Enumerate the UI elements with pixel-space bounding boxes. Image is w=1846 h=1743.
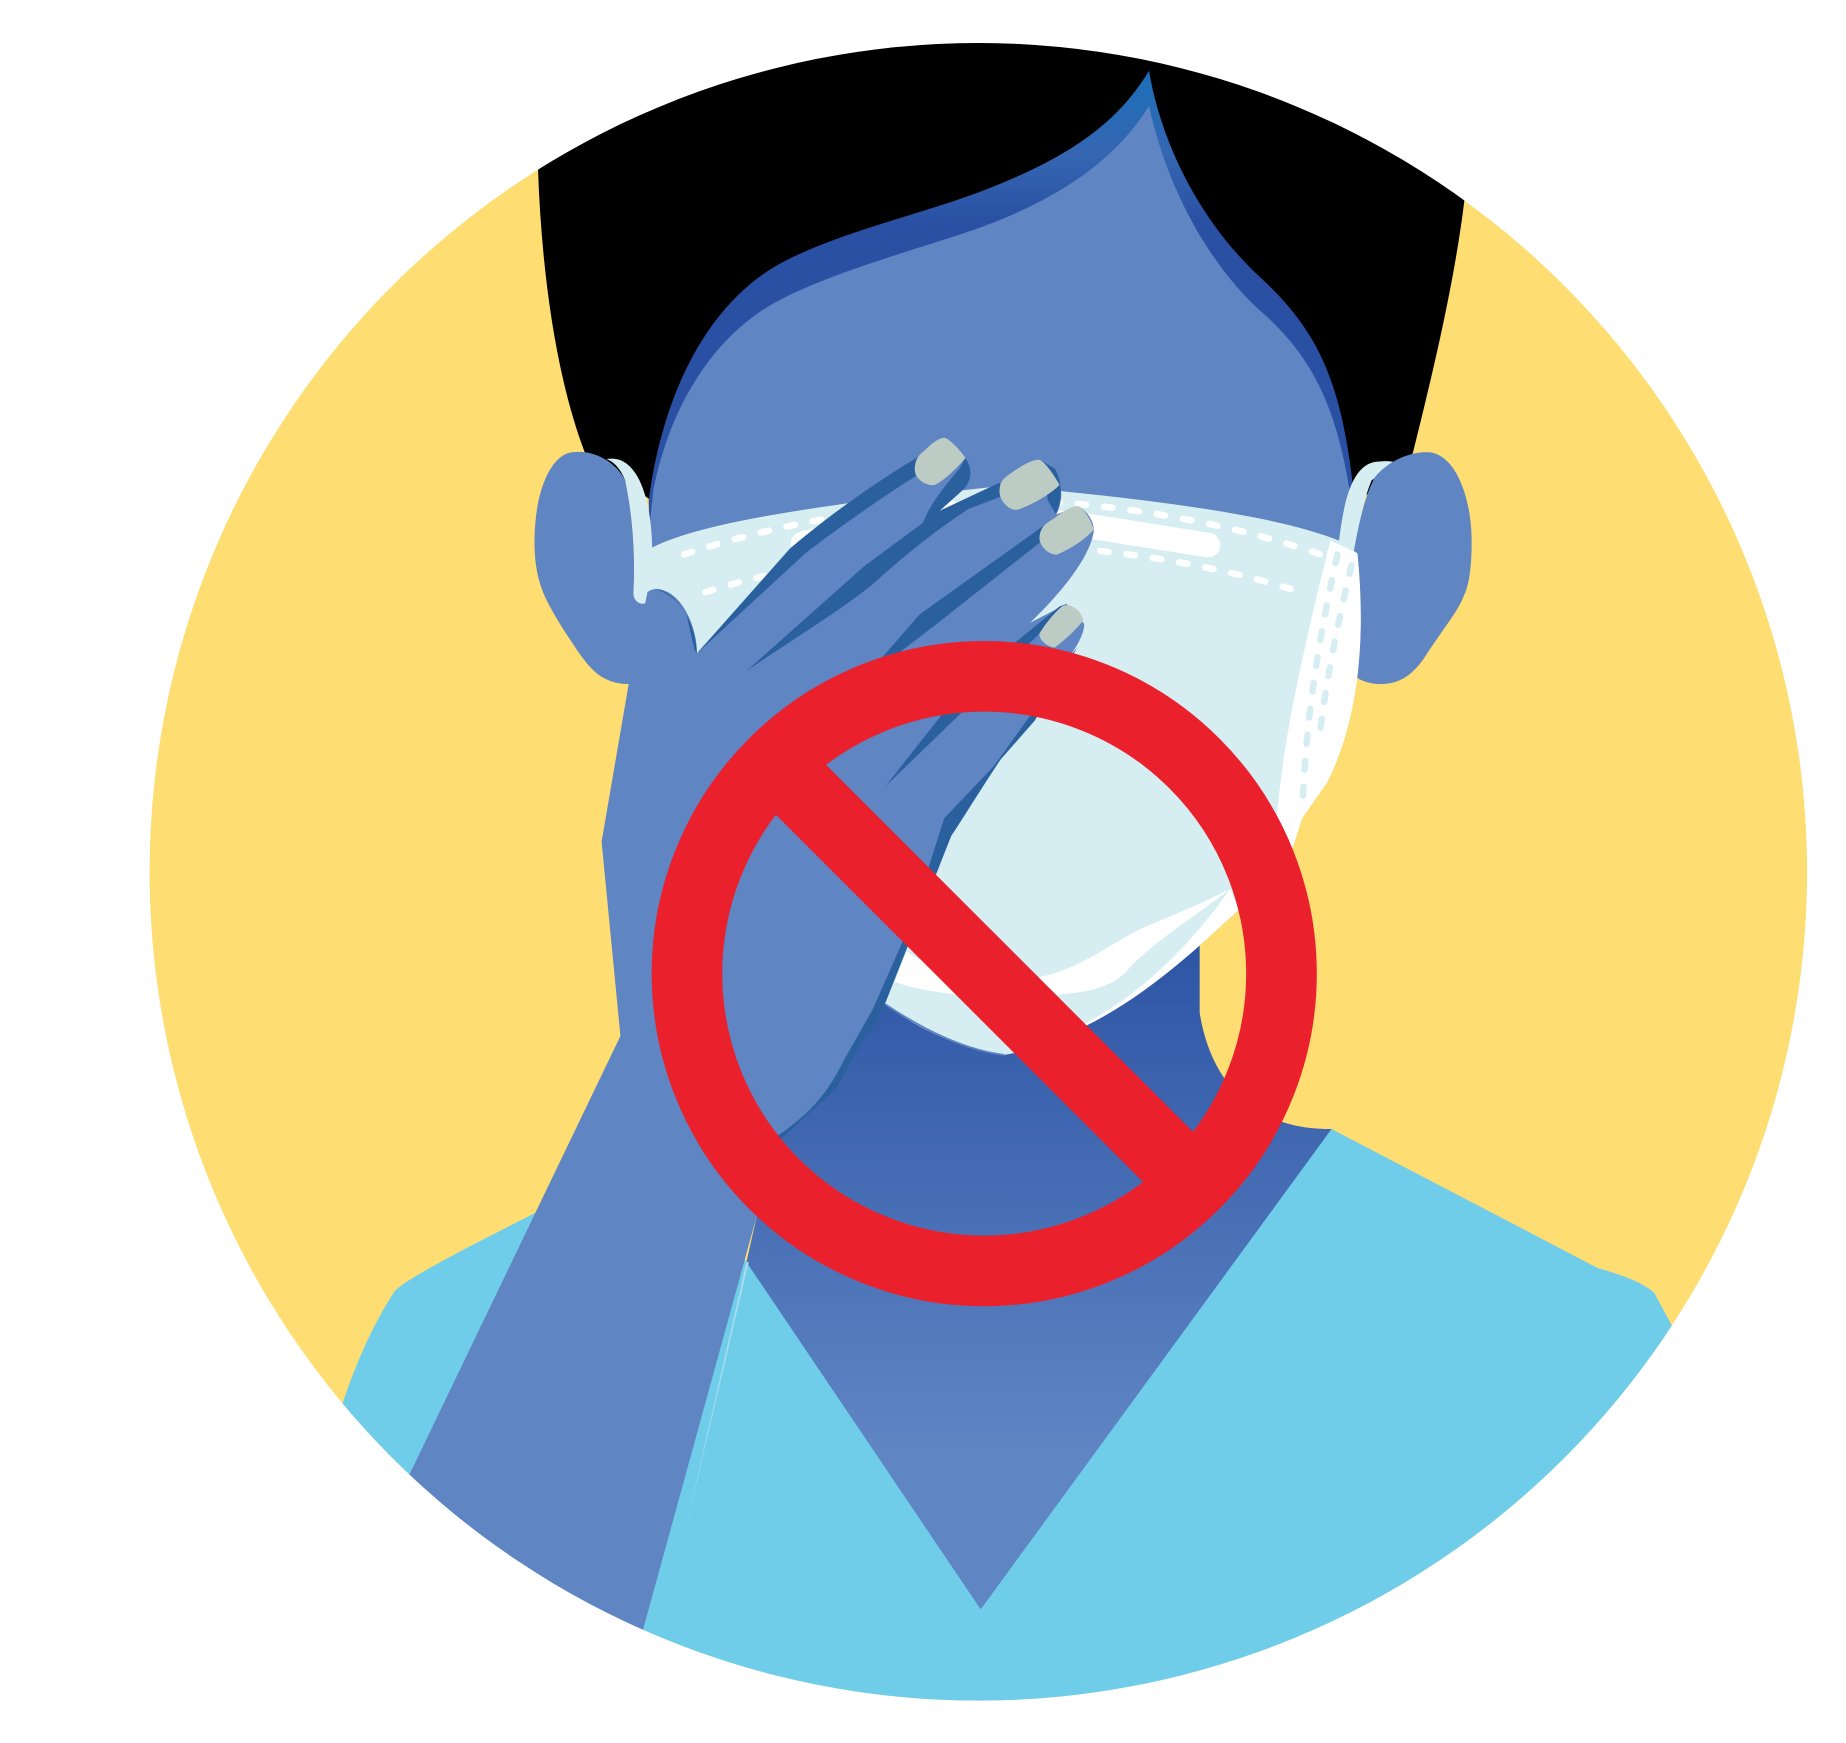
hairline shadow: [649, 71, 1354, 553]
fingernail one: [915, 438, 965, 485]
lower stitching: [705, 550, 1304, 593]
hand and arm: [353, 438, 1094, 1648]
icon: red prohibition sign: [687, 676, 1281, 1271]
left ear: [534, 452, 634, 684]
prohibition bar: [762, 751, 1207, 1195]
hand silhouette: [410, 488, 1094, 1630]
lower fold: [895, 889, 1230, 997]
finger shadow two: [746, 458, 1007, 671]
fingernail four: [1039, 605, 1083, 648]
fingertip shadow: [1041, 460, 1061, 514]
prohibition ring: [687, 676, 1281, 1271]
black hair: [538, 0, 1465, 506]
finger outer shadow: [771, 648, 1077, 1148]
right ear strap: [1339, 461, 1396, 553]
upper stitching: [684, 502, 1321, 555]
finger shadow one: [697, 452, 927, 653]
fingernail three: [1039, 506, 1094, 555]
lower edge fold: [1077, 889, 1239, 1028]
thumb shadow: [655, 589, 697, 653]
right ear: [1354, 452, 1472, 684]
side seam outer stitches: [1319, 565, 1352, 744]
finger shadow three: [882, 525, 1044, 657]
face mask: [606, 459, 1361, 1055]
mask bottom edge: [885, 1004, 1004, 1055]
mask side seam: [1276, 540, 1361, 848]
fingernail two: [1000, 460, 1060, 510]
finger shadow four: [885, 604, 1067, 786]
face: [650, 106, 1350, 565]
neck: [746, 930, 1332, 1609]
blue shirt: [342, 1129, 1672, 1701]
side seam stitches: [1303, 555, 1337, 803]
nose strip: [803, 520, 1208, 545]
mask body: [606, 459, 1361, 1055]
collar highlight line: [685, 1262, 749, 1530]
